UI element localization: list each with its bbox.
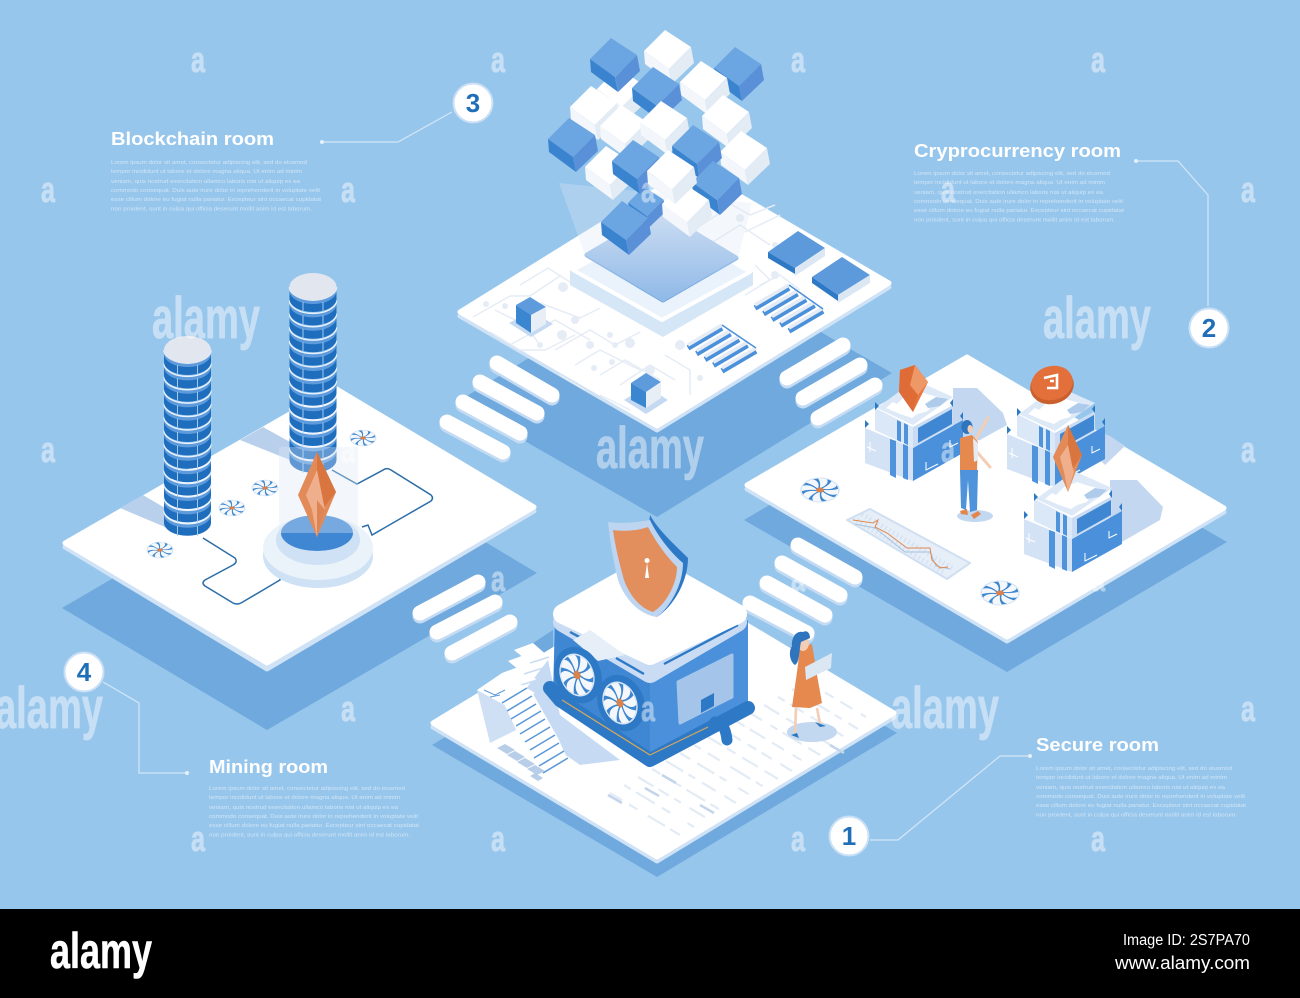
- server rack left: [865, 380, 963, 481]
- text block: mining room: esse cillum dolore eu fugiat nulla pariatur. Excepteur sint occaecat cupidatat: [209, 823, 420, 829]
- watermarks: alamy: [152, 286, 260, 351]
- small cube left: [509, 297, 553, 337]
- mining machine: [546, 515, 748, 760]
- steps from blockchain room to mining room: [447, 363, 552, 455]
- watermarks: a: [341, 429, 356, 470]
- rim: [563, 573, 737, 673]
- server rack right: [1007, 386, 1105, 487]
- steps from mining room to secure room: [420, 582, 510, 656]
- text block: mining room: veniam, quis nostrud exercitation ullamco laboris nisi ut aliquip ex ea: [209, 805, 398, 811]
- footer logo: alamy: [50, 923, 152, 979]
- text block: blockchain room: esse cillum dolore eu fugiat nulla pariatur. Excepteur sint occaecat cupidatat: [111, 197, 322, 203]
- watermarks: a: [341, 169, 356, 210]
- text block: secure room: esse cillum dolore eu fugiat nulla pariatur. Excepteur sint occaecat cupidatat: [1036, 803, 1247, 809]
- watermarks: a: [791, 39, 806, 80]
- text block: secure room: veniam, quis nostrud exercitation ullamco laboris nisi ut aliquip ex ea: [1036, 785, 1225, 791]
- watermarks: a: [641, 169, 656, 210]
- image id: Image ID: 2S7PA70: [1123, 932, 1250, 949]
- panel: secure room platform: [433, 579, 894, 861]
- callout 4: mining room: 4: [77, 657, 92, 687]
- server rack front: [1024, 471, 1122, 572]
- watermarks: a: [1091, 818, 1106, 859]
- text block: mining room: commodo consequat. Duis aute irure dolor in reprehenderit in voluptate velit: [209, 814, 419, 820]
- steps from blockchain room to cryptocurrency room: [787, 345, 875, 421]
- text block: blockchain room: [111, 128, 322, 212]
- watermarks: alamy: [891, 676, 999, 741]
- stair treads: [505, 692, 568, 774]
- callout 1: secure room: [830, 754, 1032, 856]
- callout 3: blockchain room: [320, 84, 492, 144]
- watermarks: a: [41, 169, 56, 210]
- watermarks: a: [941, 429, 956, 470]
- cast shadows: [953, 388, 1163, 543]
- text block: cryptocurrency room: Lorem ipsum dolor sit amet, consectetur adipiscing elit, sed do eiusmod: [914, 171, 1110, 177]
- text block: cryptocurrency room: tempor incididunt ut labore et dolore magna aliqua. Ut enim ad minim: [914, 180, 1106, 186]
- panel: mining room platform: [65, 273, 534, 669]
- watermarks: a: [491, 818, 506, 859]
- text block: cryptocurrency room: non proident, sunt in culpa qui officia deserunt mollit anim id est laborum.: [914, 218, 1115, 224]
- text block: mining room: non proident, sunt in culpa qui officia deserunt mollit anim id est laborum.: [209, 832, 410, 838]
- watermarks: a: [941, 169, 956, 210]
- RAM modules: [688, 285, 823, 371]
- text block: blockchain room: non proident, sunt in culpa qui officia deserunt mollit anim id est laborum.: [111, 206, 312, 212]
- callout 1: secure room: 1: [842, 821, 856, 851]
- machine body: [553, 617, 650, 757]
- top lid: [563, 565, 737, 655]
- fans: [801, 478, 1019, 605]
- base tube: [550, 688, 748, 760]
- server tower left: [164, 336, 211, 536]
- watermarks: [0, 39, 1256, 859]
- callout 4: mining room: [64, 652, 189, 775]
- watermarks: a: [1091, 558, 1106, 599]
- callout 2: cryptocurrency room: 2: [1202, 313, 1216, 343]
- fan right: [589, 667, 653, 739]
- text block: blockchain room: Blockchain room: [111, 128, 274, 149]
- steps from secure room to cryptocurrency room: [750, 545, 855, 636]
- footer bar: [0, 909, 1300, 998]
- orange gem pin: [899, 365, 928, 412]
- cast shadow of miner: [525, 660, 620, 765]
- side panel: [678, 655, 732, 723]
- small cube bottom: [624, 373, 668, 414]
- pedestal with gem: [263, 447, 373, 588]
- text block: cryptocurrency room: [914, 140, 1125, 224]
- shadows under the rooms: [62, 258, 1227, 877]
- watermarks: a: [1091, 39, 1106, 80]
- fans: [147, 430, 376, 558]
- watermarks: a: [1241, 429, 1256, 470]
- text block: mining room: [209, 756, 420, 838]
- chart panel: [847, 509, 970, 579]
- watermarks: a: [41, 429, 56, 470]
- text block: secure room: tempor incididunt ut labore et dolore magna aliqua. Ut enim ad minim: [1036, 775, 1228, 781]
- floating cube cluster: [548, 30, 770, 255]
- callout 2: cryptocurrency room: [1134, 159, 1228, 348]
- floating gem: [1053, 425, 1082, 492]
- watermarks: a: [341, 688, 356, 729]
- security shield: [608, 515, 688, 617]
- staircase: [477, 643, 568, 781]
- crypto coin: [1026, 361, 1078, 409]
- text block: secure room: Lorem ipsum dolor sit amet, consectetur adipiscing elit, sed do eiusmod: [1036, 766, 1232, 772]
- watermarks: a: [1241, 169, 1256, 210]
- person: [957, 418, 993, 522]
- text block: cryptocurrency room: Cryprocurrency room: [914, 140, 1121, 161]
- watermarks: alamy: [596, 416, 704, 481]
- slots: [570, 625, 738, 674]
- text block: cryptocurrency room: esse cillum dolore eu fugiat nulla pariatur. Excepteur sint occaecat cupidatat: [914, 208, 1125, 214]
- text block: secure room: Secure room: [1036, 734, 1159, 755]
- fan left: [546, 639, 610, 711]
- text block: blockchain room: veniam, quis nostrud exercitation ullamco laboris nisi ut aliquip ex ea: [111, 179, 300, 185]
- text block: mining room: Mining room: [209, 756, 328, 777]
- text block: blockchain room: commodo consequat. Duis aute irure dolor in reprehenderit in voluptate velit: [111, 188, 321, 194]
- text block: blockchain room: tempor incididunt ut labore et dolore magna aliqua. Ut enim ad minim: [111, 169, 303, 175]
- watermarks: a: [1241, 688, 1256, 729]
- panel: cryptocurrency room platform: [747, 357, 1224, 641]
- website: www.alamy.com: [1114, 953, 1250, 973]
- watermarks: a: [491, 558, 506, 599]
- paper vent: [573, 630, 625, 661]
- chip base: [570, 212, 753, 337]
- watermarks: alamy: [1043, 286, 1151, 351]
- panel: blockchain room platform: [460, 30, 889, 430]
- code dashes on the floor: [608, 681, 866, 835]
- text block: mining room: Lorem ipsum dolor sit amet, consectetur adipiscing elit, sed do eiusmod: [209, 786, 405, 792]
- watermarks: a: [491, 39, 506, 80]
- circuit lines: [203, 469, 432, 604]
- woman with laptop: [787, 631, 837, 742]
- text block: cryptocurrency room: veniam, quis nostrud exercitation ullamco laboris nisi ut aliquip ex ea: [914, 190, 1103, 196]
- text block: mining room: tempor incididunt ut labore et dolore magna aliqua. Ut enim ad minim: [209, 795, 401, 801]
- memory chips: [768, 231, 870, 303]
- watermarks: a: [191, 818, 206, 859]
- text block: cryptocurrency room: commodo consequat. Duis aute irure dolor in reprehenderit in voluptate velit: [914, 199, 1124, 205]
- watermarks: a: [641, 688, 656, 729]
- callout 3: blockchain room: 3: [466, 88, 480, 118]
- text block: secure room: [1036, 734, 1247, 818]
- text block: secure room: non proident, sunt in culpa qui officia deserunt mollit anim id est laborum.: [1036, 812, 1237, 818]
- watermarks: a: [791, 818, 806, 859]
- text block: secure room: commodo consequat. Duis aute irure dolor in reprehenderit in voluptate velit: [1036, 794, 1246, 800]
- hologram beam: [559, 183, 752, 302]
- tower shadows: [120, 427, 290, 527]
- watermarks: a: [191, 39, 206, 80]
- server tower right: [290, 273, 336, 473]
- watermarks: a: [791, 558, 806, 599]
- text block: blockchain room: Lorem ipsum dolor sit amet, consectetur adipiscing elit, sed do eiusmod: [111, 160, 307, 166]
- circuit traces: [473, 195, 800, 410]
